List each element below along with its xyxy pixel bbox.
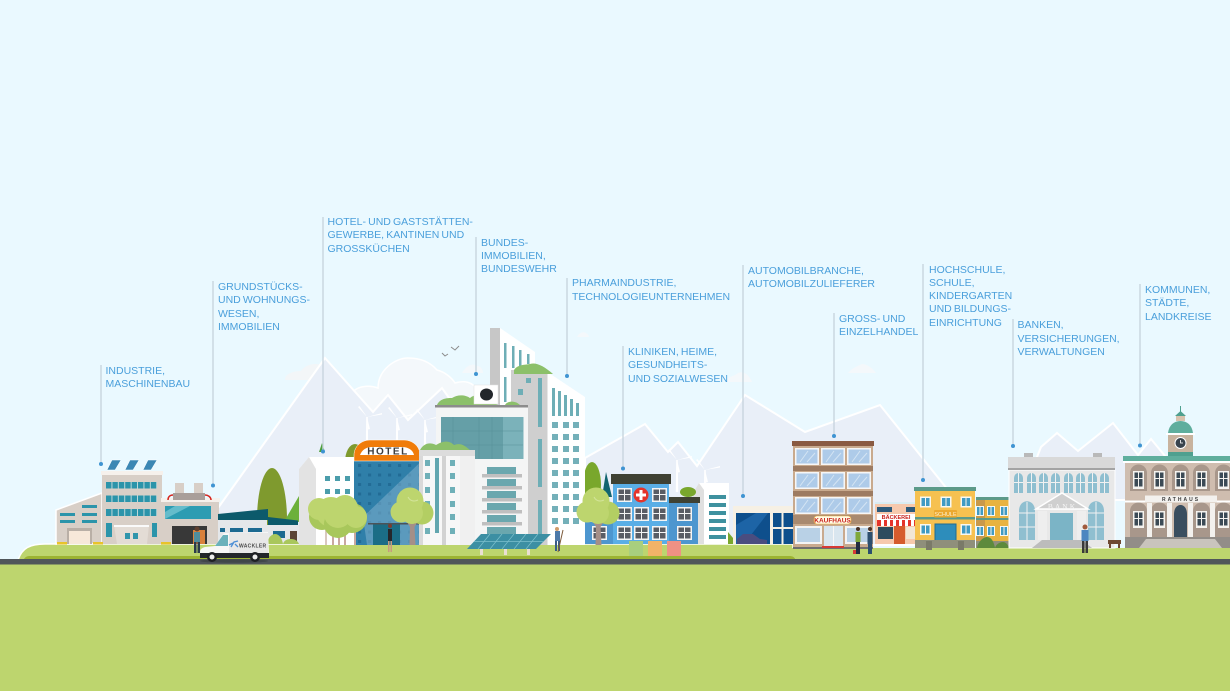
callout: Grundstuecks: UND WOHNUNGS-	[218, 294, 310, 306]
clouds	[285, 332, 876, 425]
callout: Kliniken: KLINIKEN, HEIME,	[628, 346, 717, 358]
callout: Banken: BANKEN,	[1018, 319, 1064, 331]
callout: Grundstuecks	[211, 281, 310, 488]
worker at factory	[194, 526, 200, 553]
callout: Kommunen	[1138, 284, 1212, 448]
callout: Hotel: GROSSKÜCHEN	[328, 243, 410, 255]
building: town hall: RATHAUS	[1162, 497, 1200, 503]
callout: Automobil: AUTOMOBILZULIEFERER	[748, 278, 875, 290]
callout: Pharmaindustrie	[565, 277, 730, 378]
building: bakery	[875, 502, 915, 544]
birds	[442, 346, 459, 356]
building: school: SCHULE	[934, 512, 957, 518]
callout: Hochschule: HOCHSCHULE,	[929, 264, 1005, 276]
callout: Banken: VERSICHERUNGEN,	[1018, 333, 1120, 345]
callout: Kommunen: LANDKREISE	[1145, 311, 1212, 323]
wind turbines	[358, 406, 720, 502]
building: car showroom	[728, 506, 793, 544]
solar panels on factory roof	[107, 460, 157, 470]
callout: Hotel	[321, 216, 473, 454]
tree cluster	[308, 495, 367, 545]
callout: Kliniken: GESUNDHEITS-	[628, 359, 708, 371]
callout: Hochschule: EINRICHTUNG	[929, 317, 1002, 329]
building: industrial factory	[56, 460, 220, 544]
callout: Automobil: AUTOMOBILBRANCHE,	[748, 265, 864, 277]
shop staff	[853, 527, 872, 554]
callout: Banken	[1011, 319, 1120, 448]
building: hotel: HOTEL	[367, 446, 409, 458]
callout: Hochschule: UND BILDUNGS-	[929, 303, 1012, 315]
callout: Grundstuecks: IMMOBILIEN	[218, 321, 280, 333]
building: clinic	[585, 474, 700, 544]
building: town hall	[1123, 406, 1230, 548]
bench	[1108, 540, 1121, 548]
callout: Hochschule: KINDERGARTEN	[929, 290, 1012, 302]
building: right high-rise	[511, 363, 585, 545]
ground grass strip right	[790, 548, 1230, 560]
ground grass strip left	[18, 544, 793, 560]
bank portico with sign: BANK	[1048, 502, 1077, 511]
building: tall back tower	[490, 328, 535, 406]
hotel sign	[354, 440, 420, 461]
building: school	[914, 487, 1010, 550]
red cross	[634, 488, 648, 502]
callout: Industrie	[99, 365, 190, 466]
road	[0, 559, 1230, 565]
callout: Hochschule: SCHULE,	[929, 277, 975, 289]
callout: Grundstuecks: WESEN,	[218, 308, 259, 320]
callout: Bundesimmobilien: BUNDESWEHR	[481, 263, 557, 275]
bank clerk	[1082, 524, 1088, 553]
mountains	[218, 358, 1170, 545]
building: low logistics hall	[218, 509, 299, 544]
callout: Kommunen: STÄDTE,	[1145, 297, 1189, 309]
building: white tower	[299, 457, 354, 545]
people	[194, 524, 1088, 554]
callout: Automobil	[741, 265, 875, 498]
building: department store: KAUFHAUS	[814, 518, 851, 524]
callout: Grundstuecks: GRUNDSTÜCKS-	[218, 281, 303, 293]
callout: Pharmaindustrie: TECHNOLOGIEUNTERNEHMEN	[572, 291, 730, 303]
gardener	[555, 527, 563, 552]
building: left annex	[419, 442, 475, 545]
building: federal office tower	[435, 385, 528, 545]
building: bank	[1008, 453, 1115, 548]
building: bakery: BÄCKEREI	[882, 514, 911, 521]
callout: Bundesimmobilien: IMMOBILIEN,	[481, 250, 546, 262]
hotel guest	[388, 524, 392, 552]
van	[200, 532, 269, 563]
building: hotel	[354, 440, 420, 545]
dark grass edge	[24, 556, 795, 559]
callout: Gross- und Einzelhandel	[832, 313, 919, 438]
callout: Industrie: MASCHINENBAU	[106, 378, 190, 390]
callout: Kliniken: UND SOZIALWESEN	[628, 373, 728, 385]
solar panel array	[467, 534, 551, 555]
trees in front of buildings	[308, 488, 620, 545]
department store sign	[814, 516, 851, 524]
callout: Gross- und Einzelhandel: EINZELHANDEL	[839, 326, 919, 338]
school sign	[934, 510, 957, 518]
foreground meadow	[0, 564, 1230, 691]
callout: Gross- und Einzelhandel: GROSS- UND	[839, 313, 906, 325]
recycling bins	[629, 541, 681, 556]
van logo text: WACKLER	[239, 544, 266, 550]
callout: Kommunen: KOMMUNEN,	[1145, 284, 1210, 296]
callout: Hotel: HOTEL- UND GASTSTÄTTEN-	[328, 216, 473, 228]
building: white clinic annex	[693, 483, 729, 544]
callout: Industrie: INDUSTRIE,	[106, 365, 165, 377]
roof greenery and emblem	[437, 395, 498, 405]
callout: Hochschule	[921, 264, 1012, 482]
callout: Bundesimmobilien	[474, 237, 557, 376]
clock tower	[1166, 406, 1195, 457]
town hall sign	[1145, 496, 1217, 502]
callout: Hotel: GEWERBE, KANTINEN UND	[328, 229, 465, 241]
callout: Banken: VERWALTUNGEN	[1018, 346, 1105, 358]
building: department store	[792, 441, 874, 549]
callout: Pharmaindustrie: PHARMAINDUSTRIE,	[572, 277, 676, 289]
callout: Kliniken	[621, 346, 728, 470]
callout: Bundesimmobilien: BUNDES-	[481, 237, 529, 249]
hills and trees behind buildings	[257, 443, 612, 572]
